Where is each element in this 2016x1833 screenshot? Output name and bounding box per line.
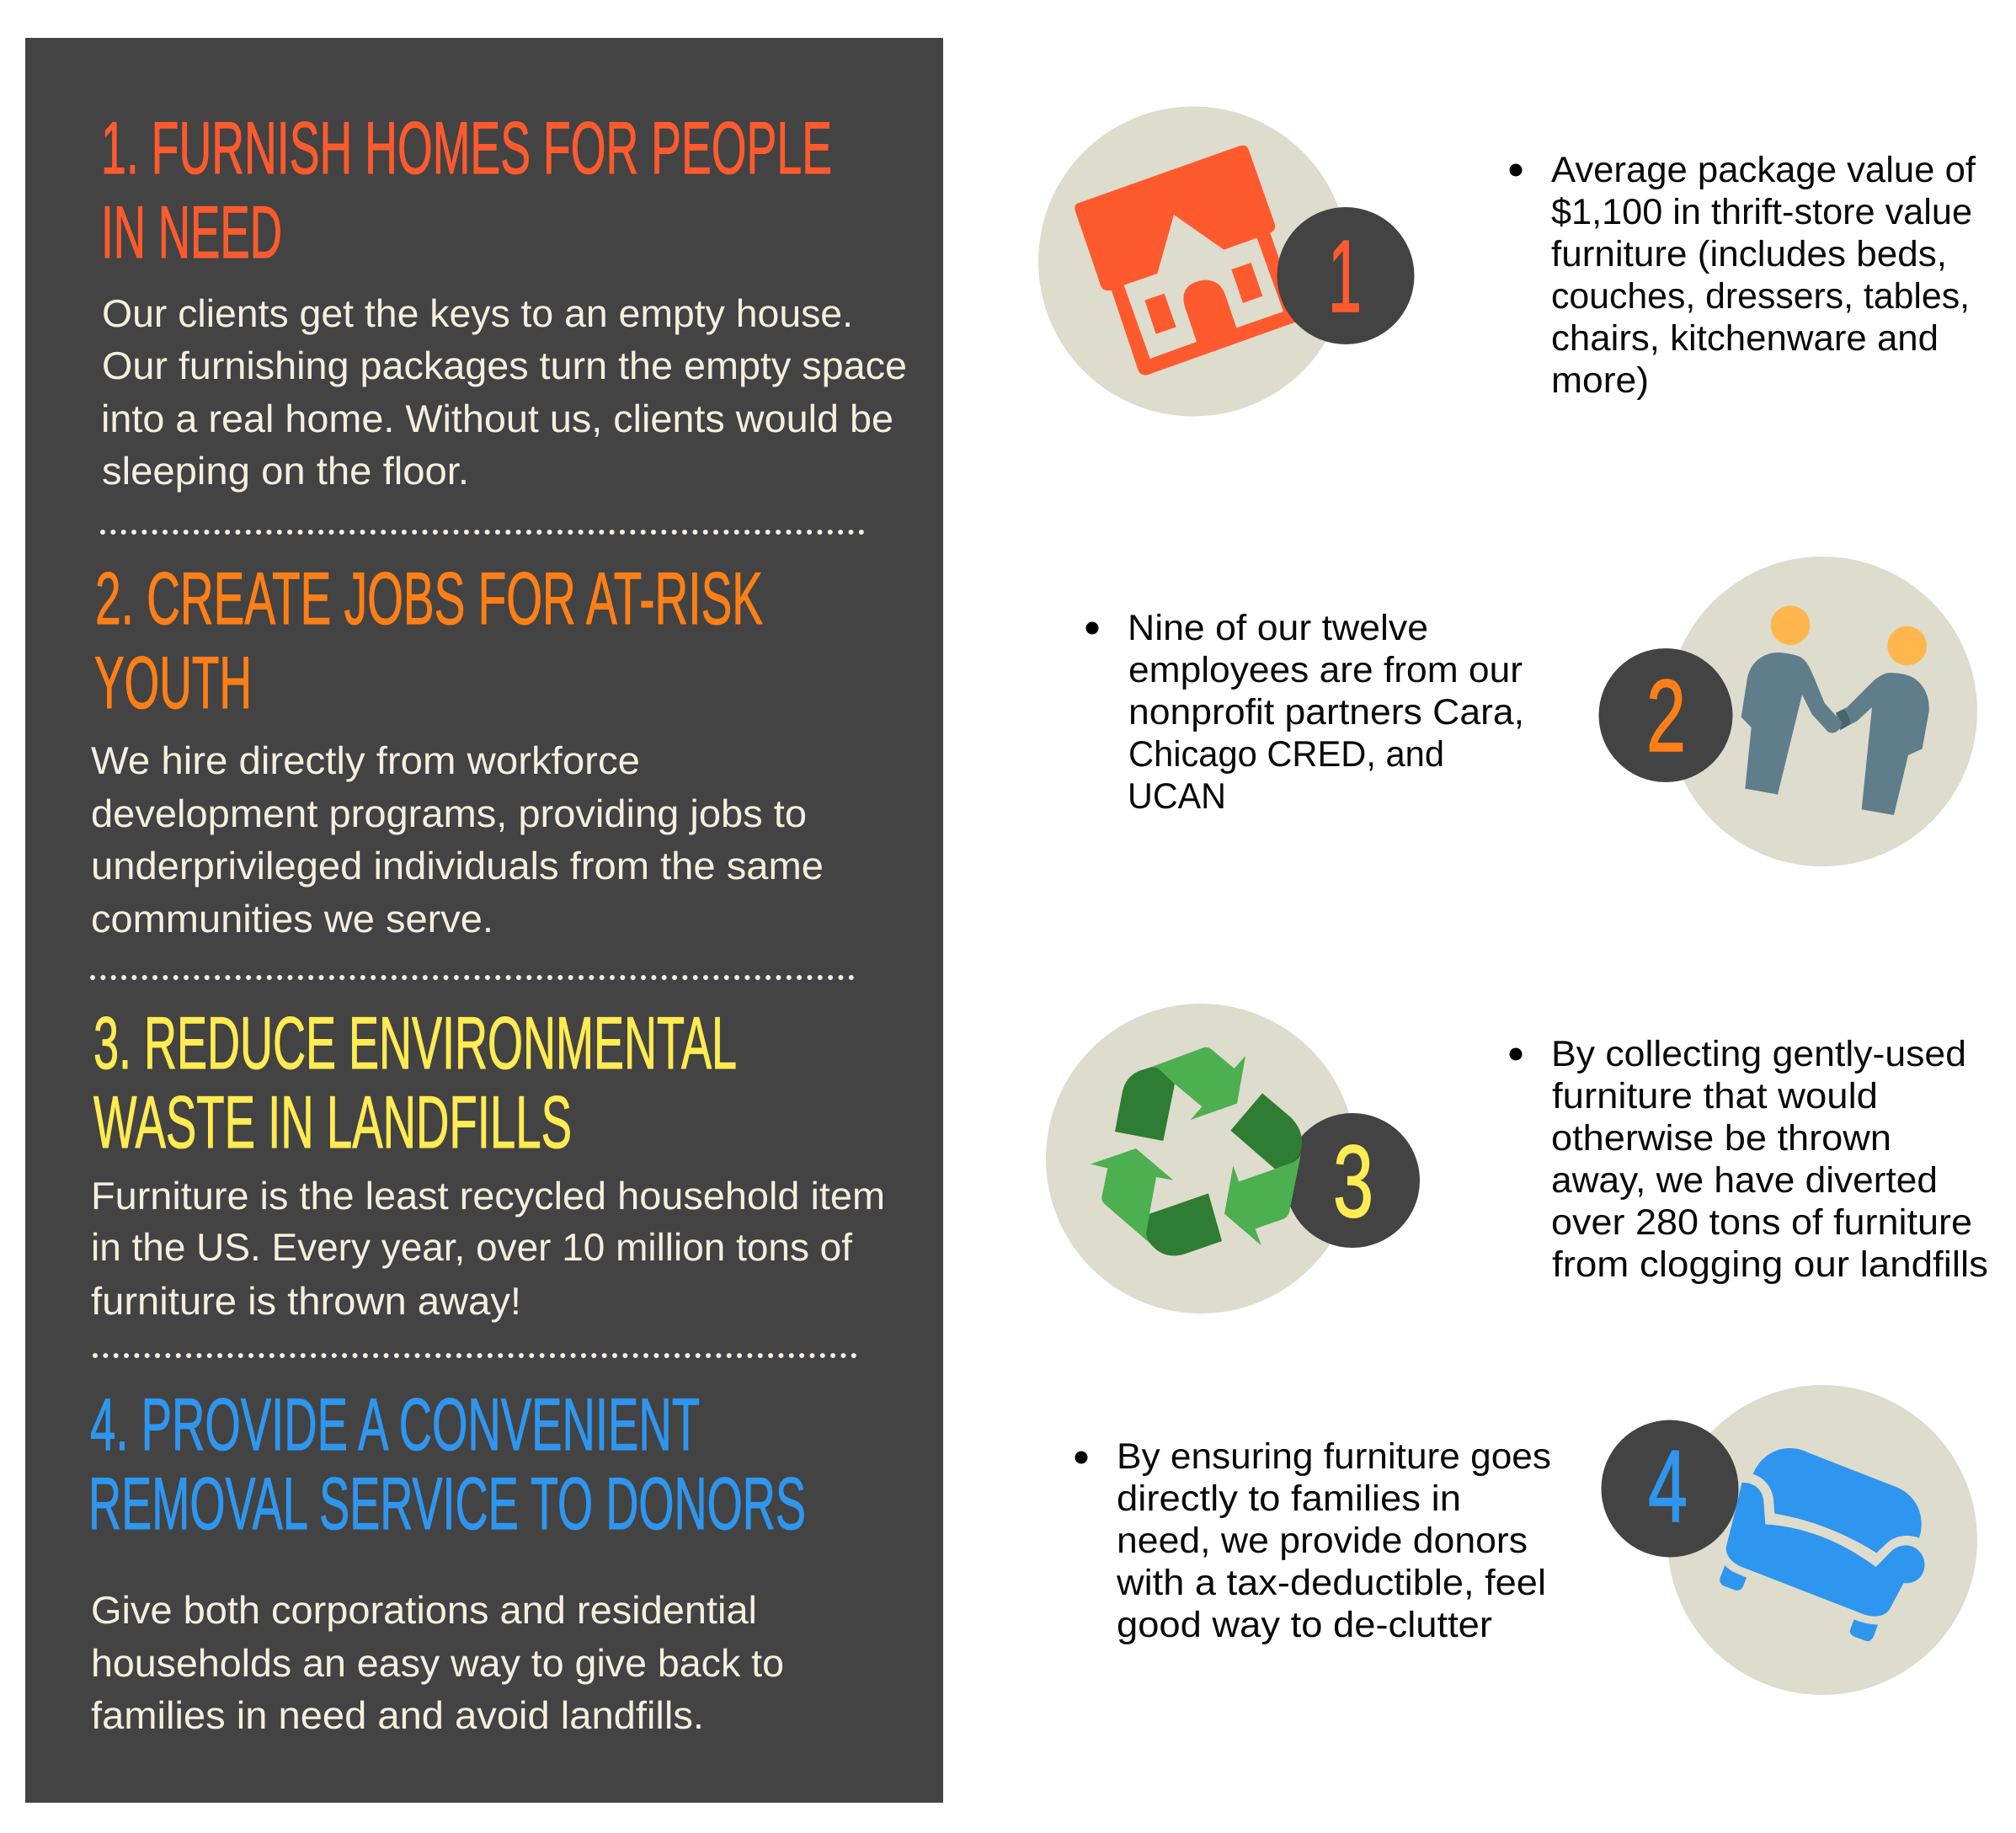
bullet text 3 [1509, 1034, 1988, 1285]
bullet text 2: nonprofit partners Cara, [1128, 692, 1524, 733]
body text 3 [91, 1174, 885, 1323]
body text 2 [91, 738, 824, 940]
body text 2: communities we serve. [91, 897, 493, 940]
bullet text 1: $1,100 in thrift-store value [1551, 192, 1972, 232]
body text 1: Our clients get the keys to an empty house. [102, 291, 853, 335]
number badge 4 [1602, 1420, 1738, 1558]
bullet text 1: furniture (includes beds, [1551, 234, 1947, 274]
item 2: handshake icon with number [1598, 557, 1977, 866]
heading 1: IN NEED [101, 190, 282, 274]
heading 4: REMOVAL SERVICE TO DONORS [88, 1462, 806, 1545]
background circle 2 [1667, 557, 1977, 866]
bullet text 1: couches, dressers, tables, [1551, 276, 1970, 317]
body text 2: underprivileged individuals from the same [91, 844, 824, 887]
bullet text 2: employees are from our [1128, 650, 1523, 690]
heading 2 [94, 557, 763, 724]
bullet text 3: By collecting gently-used [1551, 1034, 1966, 1074]
number badge 1 [1277, 207, 1415, 344]
body text 4: Give both corporations and residential [91, 1588, 757, 1632]
heading 1: 1. FURNISH HOMES FOR PEOPLE [101, 106, 832, 189]
background circle 4 [1667, 1385, 1977, 1695]
icon: sofa [1720, 1448, 1924, 1641]
body text 1 [101, 291, 907, 493]
bullet text 4: with a tax-deductible, feel [1116, 1563, 1546, 1603]
icon: house [1075, 146, 1295, 376]
heading 4 [88, 1383, 806, 1545]
heading 3: 3. REDUCE ENVIRONMENTAL [93, 1001, 737, 1084]
panel: four benefits [25, 38, 943, 1803]
bullet text 3: over 280 tons of furniture [1551, 1202, 1972, 1243]
body text 3: furniture is thrown away! [91, 1279, 521, 1323]
bullet text 1: Average package value of [1551, 150, 1976, 190]
bullet text 3: away, we have diverted [1551, 1160, 1938, 1201]
number badge 2 [1598, 648, 1733, 782]
body text 4: families in need and avoid landfills. [91, 1693, 704, 1737]
heading 2: 2. CREATE JOBS FOR AT-RISK [95, 557, 763, 640]
bullet text 1 [1509, 150, 1976, 401]
bullet text 2: Nine of our twelve [1128, 608, 1428, 648]
item 4: sofa icon with number [1602, 1385, 1977, 1695]
bullet text 4: directly to families in [1117, 1479, 1461, 1519]
item 3: recycle icon with number [1046, 1004, 1420, 1313]
bullet text 2: UCAN [1128, 776, 1226, 817]
number badge 3: 3 [1333, 1124, 1373, 1239]
number badge 2: 2 [1646, 658, 1686, 773]
body text 1: Our furnishing packages turn the empty space [102, 344, 907, 387]
heading 1 [101, 106, 832, 274]
heading 4: 4. PROVIDE A CONVENIENT [90, 1383, 700, 1466]
bullet text 3: furniture that would [1552, 1076, 1878, 1116]
background circle 1 [1038, 106, 1348, 416]
body text 1: sleeping on the floor. [102, 449, 469, 493]
body text 1: into a real home. Without us, clients would be [101, 397, 893, 440]
bullet text 4: need, we provide donors [1117, 1521, 1528, 1561]
bullet text 3: from clogging our landfills [1552, 1244, 1988, 1285]
icon: handshake [1741, 605, 1929, 815]
bullet text 3: otherwise be thrown [1551, 1118, 1891, 1159]
body text 4: households an easy way to give back to [91, 1641, 784, 1685]
bullet text 2: Chicago CRED, and [1128, 734, 1444, 775]
bullet text 4: good way to de-clutter [1117, 1605, 1492, 1645]
icon: recycle [1091, 1047, 1302, 1255]
item 1: house icon with number [1038, 106, 1415, 416]
bullet text 1: chairs, kitchenware and [1551, 318, 1939, 359]
number badge 1: 1 [1328, 219, 1362, 333]
body text 3: Furniture is the least recycled household item [91, 1174, 885, 1218]
bullet text 4 [1075, 1436, 1551, 1645]
background circle 3 [1046, 1004, 1356, 1313]
bullet text 2 [1086, 608, 1524, 817]
body text 2: We hire directly from workforce [91, 738, 640, 782]
number badge 3 [1285, 1113, 1420, 1248]
number badge 4: 4 [1648, 1429, 1688, 1543]
bullet text 1: more) [1551, 360, 1649, 401]
heading 2: YOUTH [94, 641, 252, 724]
body text 4 [91, 1588, 784, 1737]
body text 2: development programs, providing jobs to [91, 791, 807, 835]
heading 3: WASTE IN LANDFILLS [93, 1080, 572, 1164]
bullet text 4: By ensuring furniture goes [1117, 1436, 1551, 1477]
body text 3: in the US. Every year, over 10 million tons of [91, 1225, 852, 1269]
heading 3 [93, 1001, 737, 1164]
